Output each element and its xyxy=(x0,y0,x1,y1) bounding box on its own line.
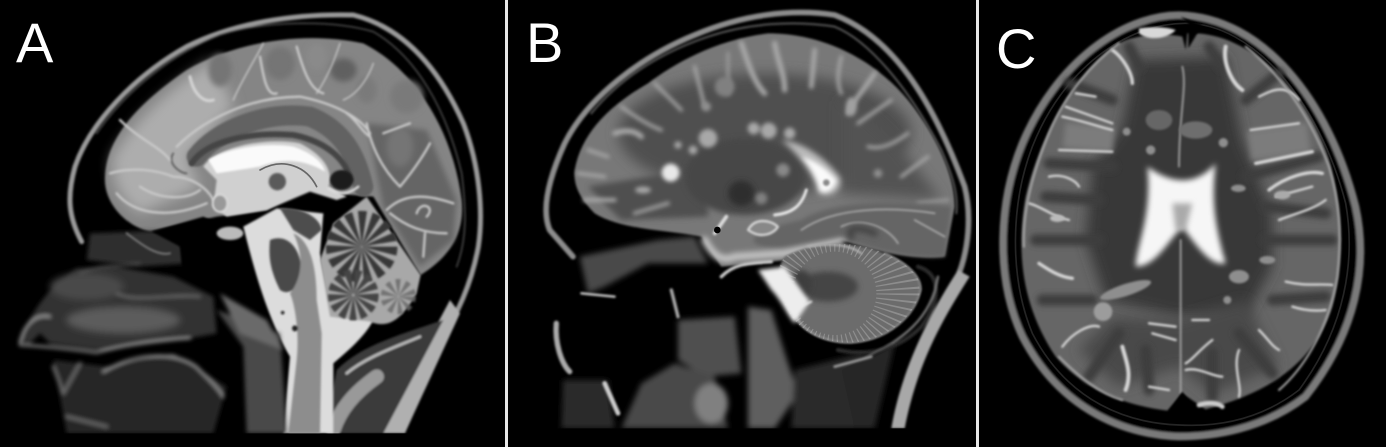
scalp and skull outline xyxy=(546,12,970,428)
interhemispheric fissure xyxy=(1179,67,1184,393)
label B: B xyxy=(526,11,563,74)
panel C: axial MRI xyxy=(1003,15,1361,437)
panel A: sagittal midline MRI xyxy=(18,15,480,433)
peripheral CSF rim xyxy=(1024,43,1340,400)
cerebrum xyxy=(574,33,955,267)
lateral ventricles xyxy=(1136,163,1226,267)
temporal lobe xyxy=(705,190,951,259)
bright sulci xyxy=(1029,47,1332,397)
scalp and skull outline xyxy=(70,15,480,433)
scalp ring xyxy=(1003,15,1361,437)
skull base sinuses and airway xyxy=(86,216,244,268)
cerebellum xyxy=(320,197,421,324)
gyral white matter blobs xyxy=(208,43,423,167)
tongue and jaw xyxy=(53,293,287,433)
divider between panels B and C xyxy=(976,0,979,447)
CSF spaces and ventricle xyxy=(203,141,373,433)
panel B: parasagittal MRI xyxy=(546,12,970,428)
sulci xyxy=(110,43,453,257)
skull base bright details xyxy=(556,290,871,413)
corpus callosum and cingulate bands xyxy=(197,115,363,187)
white matter lesions xyxy=(635,77,882,204)
skull marrow xyxy=(1015,23,1349,425)
brainstem and spinal cord xyxy=(269,208,322,433)
cerebrum xyxy=(105,38,462,275)
label C: C xyxy=(996,17,1036,80)
brain xyxy=(1021,17,1341,413)
face and nasal tissue xyxy=(18,263,217,353)
cerebellum xyxy=(778,243,923,345)
divider between panels A and B xyxy=(505,0,508,447)
basal ganglia xyxy=(685,138,805,215)
lighter frontal gyri xyxy=(1247,123,1311,161)
cortical sulci xyxy=(578,43,948,233)
skull base, orbit and neck tissue xyxy=(561,237,895,428)
white matter lesions xyxy=(1050,110,1290,321)
white matter fingers xyxy=(1036,47,1332,397)
bright CSF cistern xyxy=(758,267,810,323)
deep white matter xyxy=(1086,57,1272,317)
label A: A xyxy=(16,11,54,74)
bright periventricular lesion xyxy=(781,140,841,195)
